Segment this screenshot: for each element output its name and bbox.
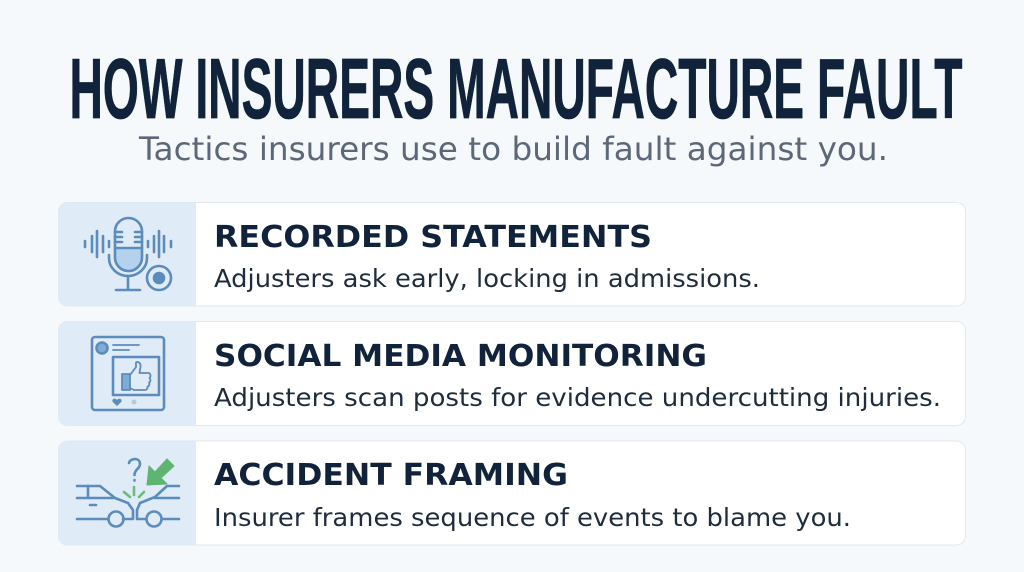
heading: ACCIDENT FRAMING xyxy=(214,458,568,493)
panel: recorded statements xyxy=(58,202,966,306)
heading: SOCIAL MEDIA MONITORING xyxy=(214,339,707,374)
description: Insurer frames sequence of events to blame you. xyxy=(214,503,851,532)
icon: microphone xyxy=(85,218,171,290)
description: Adjusters scan posts for evidence undercutting injuries. xyxy=(214,383,941,412)
icon: two cars colliding xyxy=(77,459,179,526)
description: Adjusters ask early, locking in admissions. xyxy=(214,264,760,293)
subtitle: Tactics insurers use to build fault against you. xyxy=(138,130,888,168)
panel: accident framing xyxy=(58,441,966,545)
icon: social post with thumbs up xyxy=(92,337,164,410)
panel: social media monitoring xyxy=(58,322,966,426)
heading: RECORDED STATEMENTS xyxy=(214,220,652,255)
